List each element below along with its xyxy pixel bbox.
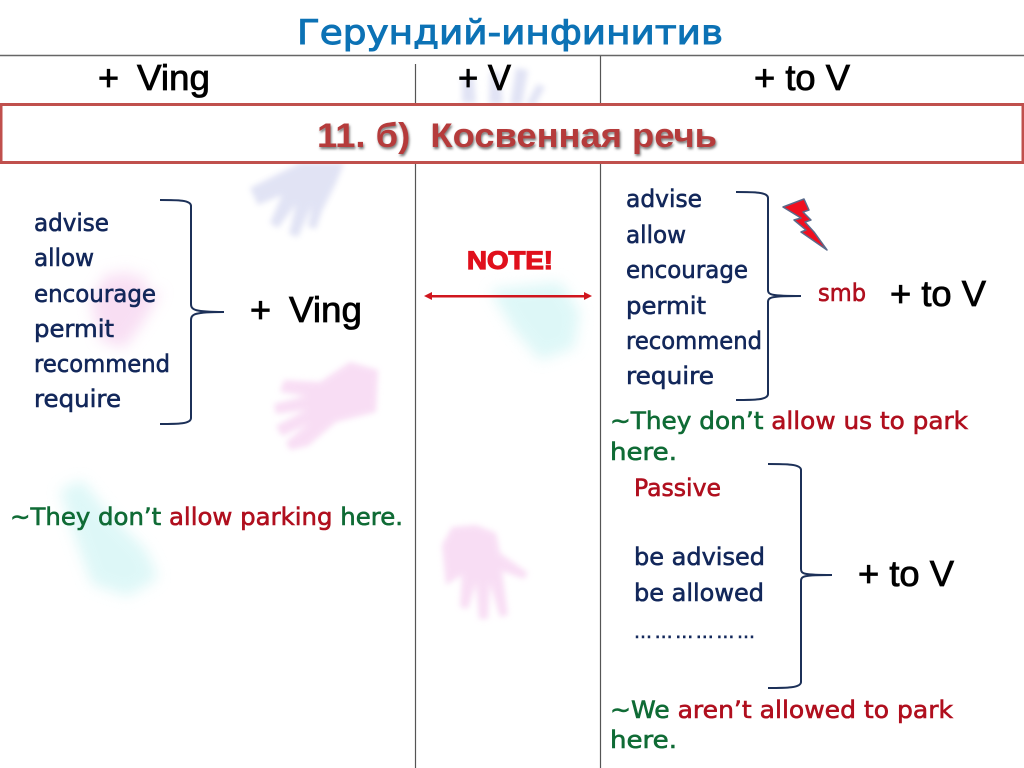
left word list: advise xyxy=(34,209,109,237)
column header: + to V: + to V xyxy=(754,57,850,98)
column header: + Ving: Ving xyxy=(137,57,210,98)
left word list: allow xyxy=(34,244,94,272)
left example: ~They don’t allow parking here. xyxy=(10,503,403,531)
right word list: advise xyxy=(626,185,702,213)
passive word list: be advised xyxy=(634,543,765,571)
right word list: recommend xyxy=(626,327,762,355)
left result: + Ving: Ving xyxy=(289,289,362,330)
right example active xyxy=(610,407,968,466)
passive brace xyxy=(768,464,832,688)
right result: + to V: + to V xyxy=(890,273,986,314)
note label: NOTE! xyxy=(467,247,553,275)
left word list: permit xyxy=(34,315,114,343)
left word list xyxy=(34,209,170,413)
section banner xyxy=(1,104,1023,162)
smb label: smb xyxy=(818,279,866,307)
right brace xyxy=(736,192,801,400)
icon: lightning bolt xyxy=(783,199,827,250)
left word list: encourage xyxy=(34,280,156,308)
left brace xyxy=(160,200,224,424)
right word list: encourage xyxy=(626,256,748,284)
right word list: permit xyxy=(626,292,706,320)
section banner: 11. б) Косвенная речь xyxy=(317,117,717,155)
right word list xyxy=(626,185,762,390)
passive label: Passive xyxy=(634,474,721,502)
right word list: allow xyxy=(626,221,686,249)
passive word list xyxy=(634,543,765,643)
right example passive xyxy=(610,696,953,754)
column header: + Ving: + xyxy=(98,57,119,98)
left result: + Ving xyxy=(250,289,362,330)
passive result: + to V: + to V xyxy=(858,553,954,594)
double arrow xyxy=(424,292,592,300)
right example passive: here. xyxy=(610,726,677,754)
left word list: recommend xyxy=(34,350,170,378)
decorative hand prints xyxy=(60,68,580,619)
right example passive: ~We aren’t allowed to park xyxy=(610,696,953,724)
right example active: ~They don’t allow us to park xyxy=(610,407,968,435)
passive word list: be allowed xyxy=(634,579,764,607)
left result: + Ving: + xyxy=(250,289,271,330)
column header: + Ving xyxy=(98,57,210,98)
left word list: require xyxy=(34,385,121,413)
title: Герундий-инфинитив xyxy=(297,13,723,53)
passive word list: ……………… xyxy=(634,622,755,643)
right word list: require xyxy=(626,362,714,390)
right example active: here. xyxy=(610,438,677,466)
column header: + V: + V xyxy=(458,57,511,98)
